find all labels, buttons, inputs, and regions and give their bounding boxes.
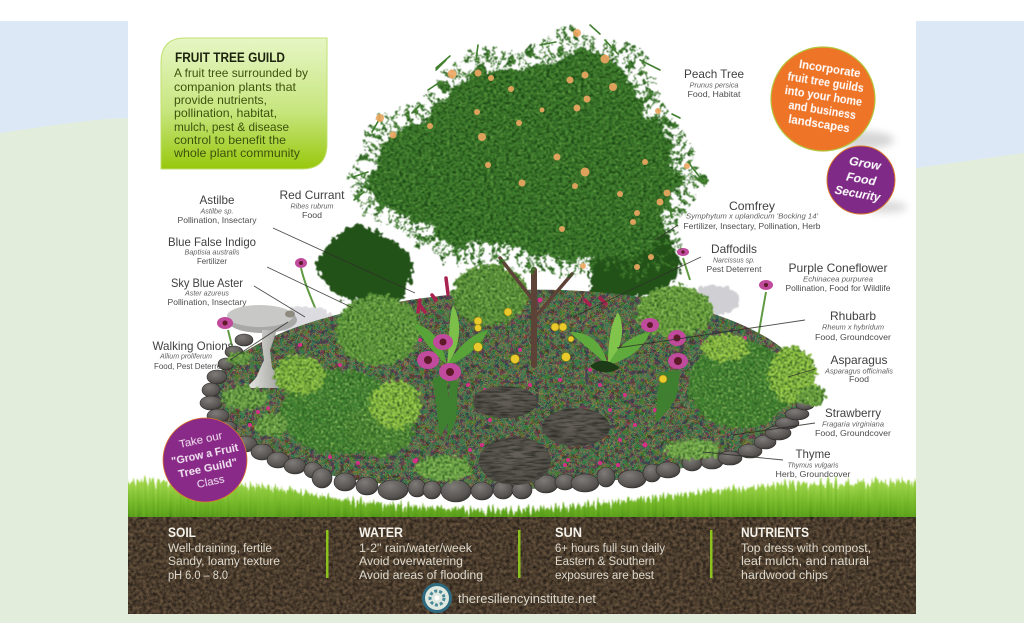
plant labels, right side bbox=[684, 67, 893, 479]
label: Astilbe: Astilbe sp. bbox=[200, 206, 234, 216]
label: Daffodils: Pest Deterrent bbox=[706, 264, 762, 274]
text callout: fruit tree guild definition: FRUIT TREE GUILD bbox=[175, 50, 285, 65]
label: Walking Onions bbox=[152, 339, 234, 371]
label: Thyme: Herb, Groundcover bbox=[776, 469, 851, 479]
label: Strawberry: Fragaria virginiana bbox=[822, 420, 884, 428]
plant labels, left side bbox=[168, 188, 345, 307]
label: Walking Onions: Walking Onions bbox=[152, 339, 234, 353]
grass strip bbox=[128, 474, 916, 517]
badge: incorporate fruit tree guilds: and business bbox=[788, 98, 857, 122]
badge: grow a fruit tree guild class bbox=[163, 418, 247, 502]
badge: grow food security: Security bbox=[834, 183, 883, 205]
website logo and address bbox=[422, 583, 596, 613]
white infographic panel bbox=[128, 21, 916, 614]
column: sun: exposures are best bbox=[555, 570, 655, 582]
label: Daffodils: Daffodils bbox=[711, 242, 757, 256]
badge: incorporate fruit tree guilds: fruit tree guilds bbox=[787, 69, 865, 95]
column: soil bbox=[168, 524, 280, 582]
page background: blue sky and green field panels bbox=[0, 0, 1024, 168]
peach tree bbox=[353, 25, 702, 365]
label: Blue False Indigo: Fertilizer bbox=[197, 256, 227, 266]
column: nutrients: Top dress with compost, bbox=[741, 543, 871, 555]
rock border bbox=[200, 334, 814, 502]
label: Red Currant: Ribes rubrum bbox=[290, 202, 334, 210]
label: Sky Blue Aster: Sky Blue Aster bbox=[171, 276, 243, 290]
column: sun: 6+ hours full sun daily bbox=[555, 543, 665, 555]
column: nutrients: NUTRIENTS bbox=[741, 524, 809, 540]
label: Walking Onions: Food, Pest Deterrent bbox=[154, 361, 229, 371]
column: water: 1-2" rain/water/week bbox=[359, 543, 472, 555]
label: Walking Onions: Allium proliferum bbox=[159, 352, 212, 360]
label: Purple Coneflower bbox=[786, 261, 891, 293]
label: Asparagus bbox=[824, 353, 893, 384]
label: Strawberry: Strawberry bbox=[825, 406, 881, 420]
label: Rhubarb: Food, Groundcover bbox=[815, 332, 891, 342]
trunk and branches bbox=[500, 258, 572, 365]
label: Peach Tree: Food, Habitat bbox=[688, 89, 741, 99]
text callout: fruit tree guild definition: whole plant community bbox=[173, 146, 300, 160]
column: water: Avoid areas of flooding bbox=[359, 570, 483, 582]
column: water: Avoid overwatering bbox=[359, 556, 463, 568]
label: Blue False Indigo bbox=[168, 235, 256, 266]
text callout: fruit tree guild definition: A fruit tree surrounded by bbox=[174, 66, 308, 80]
badge: incorporate fruit tree guilds: landscapes bbox=[787, 112, 851, 136]
text callout: fruit tree guild definition: companion plants that bbox=[174, 80, 297, 94]
maroon astilbe plumes bbox=[418, 278, 606, 312]
text callout: fruit tree guild definition: pollination, habitat, bbox=[174, 106, 277, 120]
outer leaf sprays bbox=[353, 25, 702, 218]
badge: incorporate fruit tree guilds bbox=[771, 47, 894, 151]
column: nutrients: hardwood chips bbox=[741, 570, 828, 582]
ferns bbox=[414, 305, 650, 372]
label: Daffodils bbox=[706, 242, 762, 274]
label: Sky Blue Aster: Pollination, Insectary bbox=[168, 297, 247, 307]
label: Peach Tree: Peach Tree bbox=[684, 67, 744, 81]
label: Asparagus: Asparagus bbox=[830, 353, 888, 367]
label: Purple Coneflower: Purple Coneflower bbox=[788, 261, 888, 275]
label: Astilbe: Pollination, Insectary bbox=[178, 215, 257, 225]
label: Comfrey: Fertilizer, Insectary, Pollination, Herb bbox=[684, 221, 821, 231]
label: Thyme: Thyme bbox=[796, 447, 831, 461]
label: Red Currant: Food bbox=[302, 210, 322, 220]
label: Red Currant: Red Currant bbox=[280, 188, 345, 202]
label: Thyme: Thymus vulgaris bbox=[788, 460, 839, 470]
column: soil: pH 6.0 – 8.0 bbox=[168, 570, 228, 582]
growing requirements bbox=[168, 524, 871, 582]
text callout: fruit tree guild definition bbox=[161, 38, 327, 169]
column: water: WATER bbox=[359, 524, 403, 540]
column: nutrients: leaf mulch, and natural bbox=[741, 556, 869, 568]
label: Red Currant bbox=[280, 188, 345, 220]
soil band bbox=[128, 517, 916, 614]
badge: grow food security bbox=[827, 146, 907, 214]
label: Purple Coneflower: Pollination, Food for Wildlife bbox=[786, 283, 891, 293]
label: Rhubarb: Rhubarb bbox=[830, 309, 876, 323]
yellow daffodil flowers bbox=[474, 308, 667, 383]
label: Blue False Indigo: Baptisia australis bbox=[184, 248, 240, 256]
label: Thyme bbox=[776, 447, 851, 479]
mid plantings: yarrow, rhubarb and asparagus masses bbox=[221, 265, 826, 481]
text callout: fruit tree guild definition: control to benefit the bbox=[174, 133, 286, 147]
tall coneflower stems bbox=[228, 258, 766, 362]
label: Astilbe: Astilbe bbox=[200, 193, 235, 207]
badge: incorporate fruit tree guilds: into your home bbox=[784, 83, 863, 109]
canopy foliage with feathered leaf edge bbox=[358, 38, 696, 268]
badge: grow a fruit tree guild class: Class bbox=[196, 473, 226, 491]
badge: grow food security: Grow bbox=[848, 154, 883, 173]
column: soil: Well-draining, fertile bbox=[168, 543, 272, 555]
column: sun: SUN bbox=[555, 524, 582, 540]
label: Peach Tree: Prunus persica bbox=[690, 80, 738, 90]
label: Astilbe bbox=[178, 193, 257, 225]
label: Peach Tree bbox=[684, 67, 744, 99]
ground cover bed bbox=[205, 290, 815, 490]
badge: incorporate fruit tree guilds: Incorporate bbox=[798, 57, 862, 81]
badge: grow a fruit tree guild class: Tree Guild" bbox=[177, 456, 238, 481]
label: Purple Coneflower: Echinacea purpurea bbox=[803, 274, 873, 284]
label: Sky Blue Aster bbox=[168, 276, 247, 307]
badge: grow a fruit tree guild class: Take our bbox=[178, 430, 224, 451]
text callout: fruit tree guild definition: provide nutrients, bbox=[174, 93, 267, 107]
label: Strawberry: Food, Groundcover bbox=[815, 428, 891, 438]
pink groundcover flowers bbox=[248, 298, 767, 478]
label: Asparagus: Asparagus officinalis bbox=[824, 366, 893, 376]
peaches bbox=[376, 29, 690, 270]
leader lines from labels to plants bbox=[230, 225, 815, 460]
website logo and address: theresiliencyinstitute.net bbox=[458, 591, 596, 606]
stepping stones bbox=[473, 386, 610, 485]
badge: grow food security: Food bbox=[845, 170, 878, 189]
purple coneflower blooms bbox=[217, 248, 773, 381]
coneflower stems and leaves bbox=[433, 370, 680, 440]
label: Comfrey bbox=[684, 199, 821, 231]
column: soil: Sandy, loamy texture bbox=[168, 556, 280, 568]
label: Rhubarb bbox=[815, 309, 891, 342]
column: sun: Eastern & Southern bbox=[555, 556, 655, 568]
label: Strawberry bbox=[815, 406, 891, 438]
label: Comfrey: Symphytum x uplandicum 'Bocking 14' bbox=[686, 212, 819, 220]
garden bed illustration bbox=[152, 224, 826, 502]
white flower clusters bbox=[280, 285, 739, 340]
column: sun bbox=[555, 524, 665, 582]
birdbath bbox=[227, 305, 297, 388]
label: Rhubarb: Rheum x hybridum bbox=[822, 322, 884, 332]
label: Sky Blue Aster: Aster azureus bbox=[184, 288, 229, 298]
text callout: fruit tree guild definition: mulch, pest & disease bbox=[174, 120, 289, 134]
label: Daffodils: Narcissus sp. bbox=[713, 256, 755, 264]
label: Comfrey: Comfrey bbox=[729, 199, 775, 213]
column: soil: SOIL bbox=[168, 524, 196, 540]
column: water bbox=[359, 524, 483, 582]
back shrubs: red currant and comfrey bbox=[316, 224, 680, 306]
label: Asparagus: Food bbox=[849, 374, 869, 384]
column: nutrients bbox=[741, 524, 871, 582]
label: Blue False Indigo: Blue False Indigo bbox=[168, 235, 256, 249]
badge: grow a fruit tree guild class: "Grow a Fruit bbox=[170, 442, 240, 468]
